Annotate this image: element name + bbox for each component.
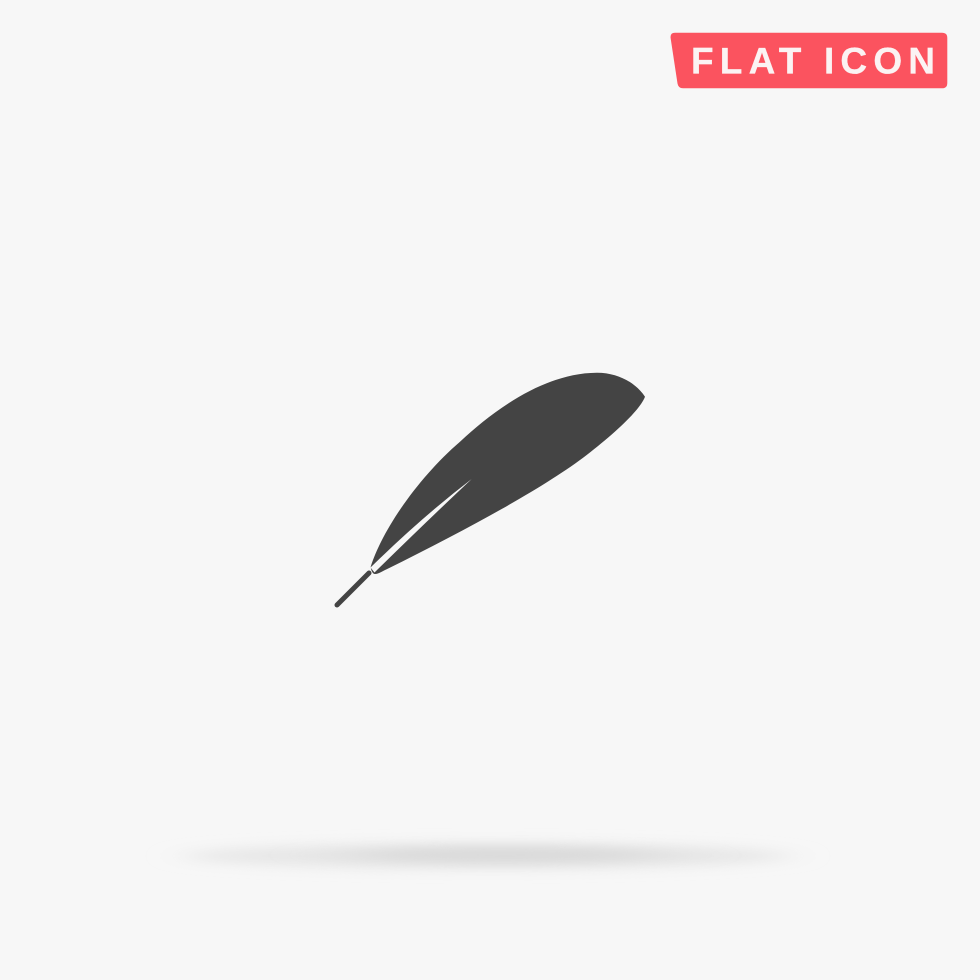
icon: feather bbox=[337, 373, 645, 605]
feather quill bbox=[337, 573, 369, 605]
badge text: FLAT ICON bbox=[691, 40, 935, 81]
badge background bbox=[671, 33, 947, 88]
ground shadow bbox=[184, 843, 792, 869]
feather slit bbox=[370, 479, 472, 572]
feather vane bbox=[371, 373, 645, 574]
badge: flat icon bbox=[671, 33, 947, 88]
